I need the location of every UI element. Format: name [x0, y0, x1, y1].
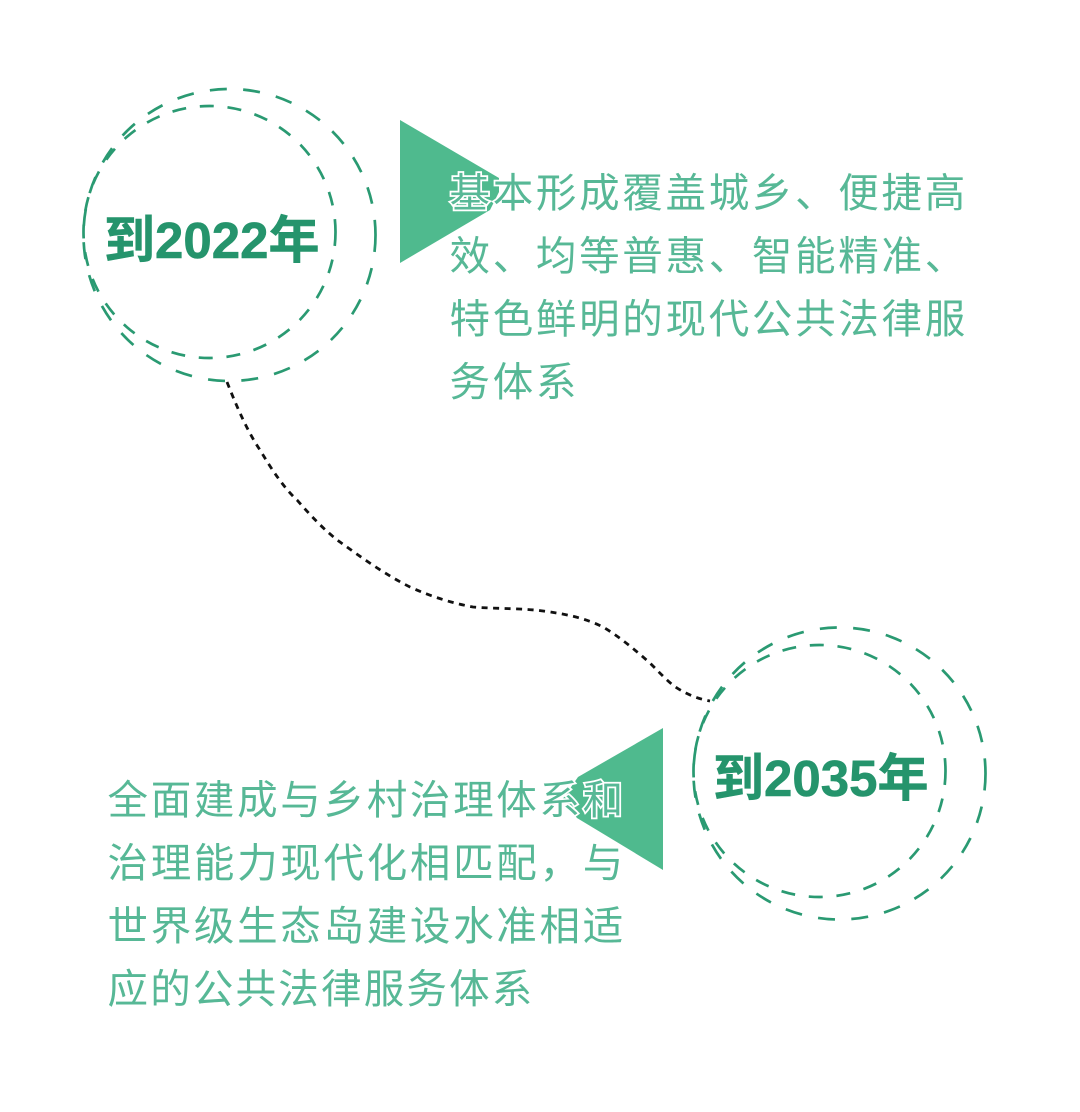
- text block: 2022 goal: 基本形成覆盖城乡、便捷高: [450, 170, 968, 216]
- connector: dotted curve between milestones: [227, 382, 710, 701]
- panel: 2035 milestone: [108, 628, 986, 1012]
- panel: 2022 milestone: [84, 89, 968, 405]
- text block: 2022 goal: 效、均等普惠、智能精准、: [450, 233, 968, 279]
- text block: 2035 goal: 全面建成与乡村治理体系和: [108, 777, 626, 823]
- text block: 2022 goal: [450, 170, 968, 405]
- icon: right-pointing triangle: [400, 120, 499, 263]
- heading: 到2035年: 到2035年: [713, 750, 928, 807]
- text block: 2022 goal: 务体系: [450, 359, 579, 405]
- text block: 2035 goal: 世界级生态岛建设水准相适: [108, 903, 626, 949]
- text block: 2035 goal: [108, 777, 626, 1012]
- text block: 2035 goal: 治理能力现代化相匹配，与: [108, 840, 626, 886]
- text block: 2022 goal: 特色鲜明的现代公共法律服: [450, 296, 968, 342]
- icon: double dashed circle 2035: [694, 628, 986, 920]
- icon: left-pointing triangle: [562, 728, 663, 870]
- icon: double dashed circle 2022: [84, 89, 376, 381]
- text block: 2035 goal: 应的公共法律服务体系: [108, 966, 534, 1012]
- heading: 到2022年: 到2022年: [104, 212, 319, 269]
